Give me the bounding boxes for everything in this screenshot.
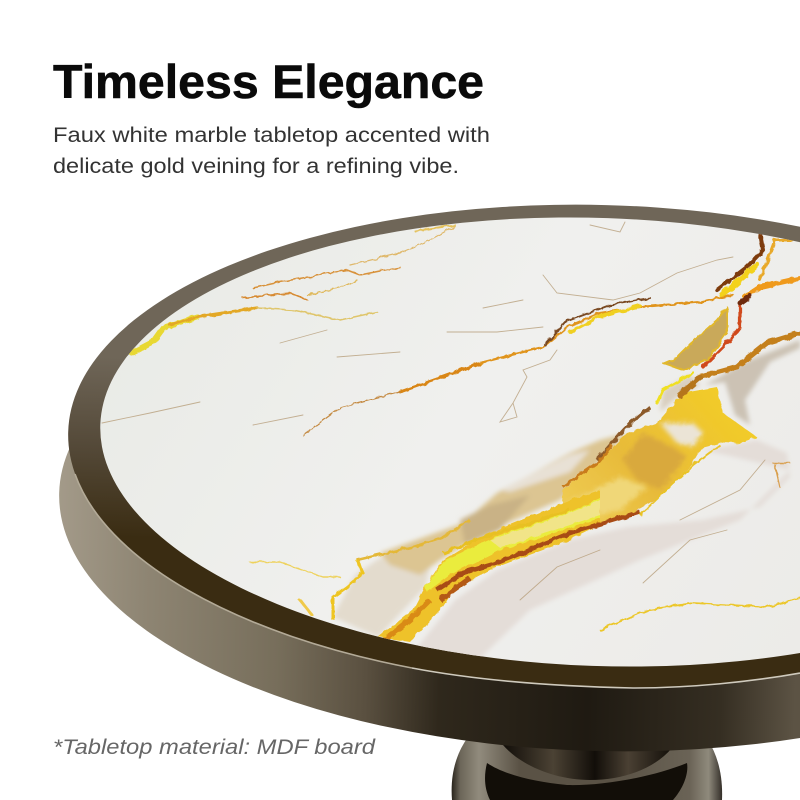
description text: delicate gold veining for a refining vibe. <box>53 155 459 178</box>
rim glossy highlight line <box>412 668 800 688</box>
fine marble veins <box>102 222 765 600</box>
rim inner ring <box>62 191 800 701</box>
title: Timeless Elegance <box>53 55 484 108</box>
rim lower-left lip <box>75 474 412 668</box>
description text <box>53 124 490 178</box>
footnote: *Tabletop material: MDF board <box>53 736 376 759</box>
upper right gold veins <box>303 233 800 435</box>
pale washes <box>333 340 800 668</box>
upper left gold veins <box>132 225 455 353</box>
ochre and pale patches <box>567 423 703 523</box>
pedestal base <box>452 740 722 800</box>
table rim outer body <box>53 249 800 765</box>
main gold vein mass <box>333 387 757 642</box>
lower gold veins <box>250 463 800 630</box>
marble tabletop <box>90 200 800 680</box>
pedestal neck <box>503 745 672 780</box>
description text: Faux white marble tabletop accented with <box>53 124 490 147</box>
